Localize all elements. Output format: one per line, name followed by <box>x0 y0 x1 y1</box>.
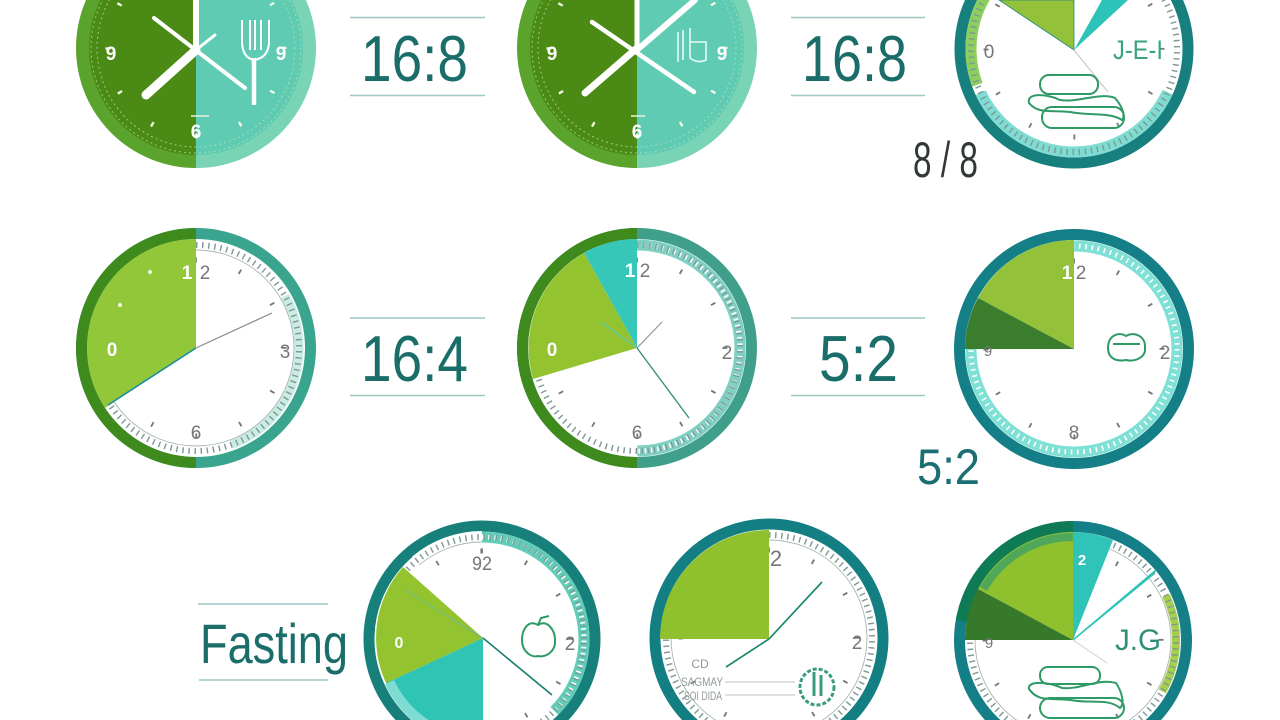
icon: apple <box>522 616 555 656</box>
wedge: green <box>376 567 483 683</box>
hands <box>146 0 245 95</box>
wedge: dark green <box>965 589 1073 640</box>
clock: 16:4 row 2 left: 0 <box>107 340 117 361</box>
clock: row 3 left, apple: 2 <box>565 634 575 655</box>
wedge: green <box>978 532 1073 640</box>
clock: 16:4 row 2 left: 1 <box>182 263 193 284</box>
clock: 16:8 row 1 middle, green and mint: 6 <box>632 122 642 143</box>
clock: row 3 middle, brain: 2 <box>852 633 862 654</box>
clock: 16:4 row 2 left: 2 <box>200 263 210 284</box>
clock: row 2 right, teal ring with lips <box>960 234 1188 464</box>
caption lines: CD <box>691 657 709 671</box>
clock: 16:8 row 1 middle, green and mint: 9 <box>547 44 557 65</box>
icon: sandwich <box>1029 75 1124 128</box>
wedge: teal <box>1073 532 1113 640</box>
clock: row 2 right, teal ring with lips: 1 <box>1062 263 1073 284</box>
icon: fork <box>242 20 269 105</box>
clock: row 2 right, teal ring with lips: 8 <box>1069 423 1079 444</box>
wedge: dark green <box>965 298 1074 349</box>
clock: row 3 left, apple <box>338 495 626 720</box>
clock: row 2 right, teal ring with lips: 2 <box>1076 263 1086 284</box>
clock: 16:8 row 1 middle, green and mint: 9 <box>717 44 727 65</box>
clock: row 3 right, sandwich <box>932 499 1214 720</box>
icon: brain <box>800 669 834 705</box>
clock: row 2 middle <box>517 228 752 468</box>
label: 5:2 fragment: 5:2 <box>917 439 980 495</box>
caption lines: SAGMAY <box>681 675 723 689</box>
wedge: eating window <box>87 239 196 408</box>
wedge: bottom teal <box>386 638 483 720</box>
clock: row 3 right, sandwich: 2 <box>1078 552 1086 569</box>
icon: sandwich <box>1029 667 1124 718</box>
label: 16:8 row 1 right: 16:8 <box>802 22 907 95</box>
icon: bowl <box>678 28 706 62</box>
clock: row 2 right, teal ring with lips: 9 <box>984 343 992 360</box>
label: Fasting: Fasting <box>200 612 348 675</box>
icon: lips <box>1108 334 1145 360</box>
clock: 16:8 row 1 middle, green and mint <box>517 0 757 168</box>
clock: 16:8 row 1 left, green and mint <box>76 0 316 168</box>
clock: row 2 middle: 2 <box>640 261 650 282</box>
wedge: thin teal <box>1073 570 1156 640</box>
clock: row 3 left, apple: 92 <box>472 554 492 575</box>
label: 16:4: 16:4 <box>361 322 468 395</box>
label: 5:2 row 2 <box>791 318 925 396</box>
clock: 16:8 row 1 left, green and mint: 9 <box>276 44 286 65</box>
label: 16:8 row 1 left: 16:8 <box>361 22 468 95</box>
clock: 16:8 row 1 left, green and mint: 6 <box>191 122 201 143</box>
clock: 16:4 row 2 left: 6 <box>191 423 201 444</box>
clock: row 3 left, apple: 0 <box>395 635 404 652</box>
hands <box>585 0 695 93</box>
clock: row 2 middle: 2 <box>722 343 732 364</box>
wedge: green <box>978 240 1074 349</box>
clock: 16:8 row 1 left, green and mint: 9 <box>106 44 116 65</box>
clock: row 2 right, teal ring with lips: 2 <box>1160 343 1170 364</box>
clock: row 2 middle: 6 <box>632 423 642 444</box>
clock: 16:4 row 2 left <box>55 207 337 489</box>
label: 8/8 fragment: 8 / 8 <box>913 132 978 188</box>
clock: row 3 middle, brain: 2 <box>770 546 782 571</box>
clock: row 1 right, teal ring with sandwich <box>937 0 1211 186</box>
caption lines <box>681 657 795 703</box>
wedge: teal <box>584 239 637 348</box>
label: 5:2 row 2: 5:2 <box>819 322 898 395</box>
icon label: J-E-I <box>1113 35 1163 65</box>
clock: row 3 middle, brain <box>655 524 883 720</box>
clock: row 3 right, sandwich: 9 <box>985 635 993 652</box>
wedge: green <box>660 530 769 639</box>
clock: row 2 middle: 1 <box>625 261 636 282</box>
caption lines: SOI DIDA <box>684 689 722 703</box>
clock: 16:4 row 2 left: 3 <box>280 342 290 363</box>
icon label: J.G <box>1115 624 1161 657</box>
clock: row 2 middle: 0 <box>547 340 557 361</box>
wedge: green <box>528 253 637 379</box>
clock: row 1 right, teal ring with sandwich: 0 <box>984 42 994 63</box>
